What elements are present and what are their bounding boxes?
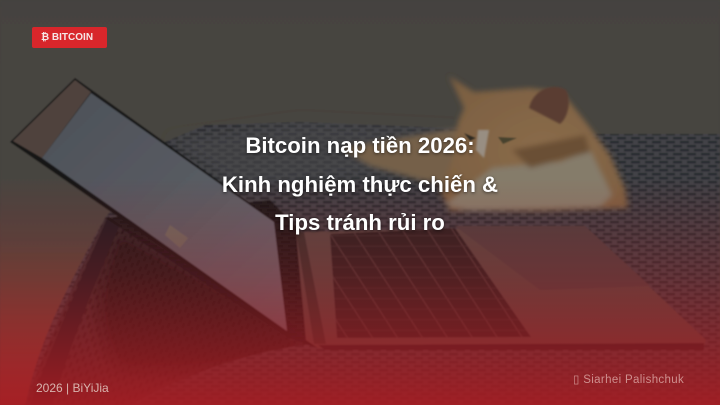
cat (340, 76, 628, 211)
cat: eye left (464, 133, 476, 141)
blanket haze near the back (170, 122, 460, 190)
bed surface left (0, 240, 130, 405)
cat: eye right (498, 137, 517, 144)
cat: blaze (476, 130, 489, 158)
title: Tips tránh rủi ro (275, 210, 445, 235)
footer: year and site: 2026 | BiYiJia (36, 381, 109, 395)
cat: shade (512, 135, 590, 168)
title: Kinh nghiệm thực chiến & (222, 172, 498, 197)
cat: arm (340, 128, 475, 190)
laptop screen (10, 78, 289, 335)
cat: body (440, 76, 628, 211)
title: Bitcoin nạp tiền 2026: (245, 133, 475, 158)
blanket fold shadow (99, 230, 310, 371)
cat: chest white (445, 150, 612, 211)
footer: photo credit: ▯ Siarhei Palishchuk (573, 374, 684, 386)
blanket back (25, 122, 720, 405)
laptop base (296, 226, 706, 350)
blanket left fold (25, 218, 720, 405)
title (222, 133, 498, 236)
blanket front lower band (130, 345, 720, 405)
keyboard (330, 228, 531, 338)
badge: Bitcoin tag (32, 27, 107, 48)
badge: Bitcoin tag: ₿ BITCOIN (41, 32, 93, 43)
shadow under screen (105, 200, 318, 348)
cat: ear (529, 87, 569, 124)
